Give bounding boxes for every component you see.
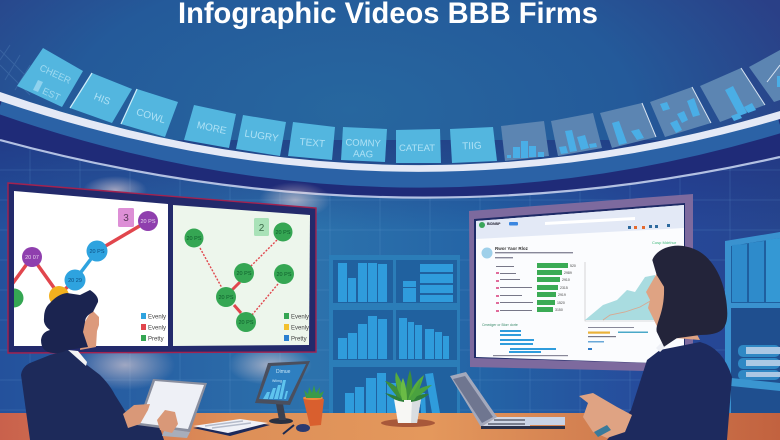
node: 20 PS xyxy=(219,295,234,301)
panel: network chart 2 xyxy=(173,205,310,346)
badge 3: 3 xyxy=(123,213,129,224)
side shelf xyxy=(725,232,780,414)
node xyxy=(22,247,42,267)
mouse and pen xyxy=(283,424,310,434)
tile: CHEER: EST xyxy=(40,86,62,104)
green bar chart: 2989 xyxy=(564,271,572,275)
hand xyxy=(579,393,632,438)
blue bar chart xyxy=(482,323,568,356)
node: 20 PS xyxy=(90,249,105,255)
badge 3 xyxy=(118,208,134,227)
monitor bars xyxy=(263,380,288,399)
panel: right wall display xyxy=(469,194,693,372)
desktop monitor xyxy=(255,361,310,424)
person: man with laptop xyxy=(21,290,207,440)
tile: LUGRY xyxy=(236,115,286,156)
node: 20 PS xyxy=(237,271,252,277)
node: 20 PS xyxy=(277,272,292,278)
badge 2: 2 xyxy=(259,223,265,234)
browser header: BIDNBP xyxy=(487,222,501,226)
tile: TEXT xyxy=(288,122,335,160)
tile: CATEAT xyxy=(396,129,441,163)
desk xyxy=(0,413,780,440)
node: 20 PS xyxy=(141,219,156,225)
potted plant: orange xyxy=(303,385,324,426)
tile: LUGRY: LUGRY xyxy=(244,128,279,145)
blue bar chart: Cmedger or Blorr dorte xyxy=(482,323,518,327)
legend: Evenly xyxy=(148,326,166,332)
bookshelf xyxy=(329,255,460,415)
green bar chart: 2315 xyxy=(560,286,568,290)
tile: HIS: HIS xyxy=(92,91,112,108)
wall glows xyxy=(75,176,331,390)
chart tile 3 xyxy=(600,103,656,148)
tile: COWL: COWL xyxy=(135,107,167,126)
node xyxy=(64,270,86,290)
green bar chart: 2919 xyxy=(558,293,566,297)
legend: Evenly xyxy=(148,314,166,320)
laptop xyxy=(137,379,207,438)
tile: CHEER xyxy=(17,48,83,107)
node xyxy=(138,211,158,231)
tile: COMNY AAG: AAG xyxy=(353,149,373,160)
node: 20 PS xyxy=(276,230,291,236)
green bar chart xyxy=(496,263,576,312)
hair xyxy=(652,246,727,347)
shirt collar xyxy=(68,350,87,366)
legend: Pretty xyxy=(291,336,307,342)
node: 20 07 xyxy=(25,255,39,261)
lower-right summary xyxy=(588,327,648,350)
tile: HIS xyxy=(70,73,132,123)
display frame xyxy=(8,183,316,353)
tile: TIIG xyxy=(450,127,497,163)
hair xyxy=(41,290,98,353)
tile: CHEER: CHEER xyxy=(38,63,73,87)
panel: network chart 3 xyxy=(4,191,168,346)
chart tile 1 xyxy=(501,121,549,161)
hands xyxy=(123,404,150,428)
display frame xyxy=(469,194,693,372)
desktop monitor: Wtimg xyxy=(272,379,282,383)
person: woman presenting xyxy=(579,246,732,440)
tile: COMNY AAG: COMNY xyxy=(345,137,382,150)
tile: TIIG: TIIG xyxy=(462,141,482,152)
green bar chart: 1520 xyxy=(557,301,565,305)
green bar chart: 3150 xyxy=(555,308,563,312)
tile: MORE xyxy=(184,105,236,148)
page heading xyxy=(482,240,677,258)
green bar chart: 520 xyxy=(570,264,576,268)
node: 20 29 xyxy=(68,278,82,284)
node: 20 PS xyxy=(239,320,254,326)
node xyxy=(86,240,108,262)
ceiling band xyxy=(0,92,780,198)
ceiling tiles: mini bar charts xyxy=(501,50,780,161)
chart tile 6 xyxy=(749,50,780,102)
chart tile 2 xyxy=(551,113,602,156)
page heading: Cosp Mdrthur xyxy=(652,240,677,245)
shirt collar xyxy=(656,337,676,352)
jacket xyxy=(21,350,164,440)
legend: Evenly xyxy=(291,314,309,320)
legend xyxy=(284,313,309,342)
face xyxy=(80,310,99,350)
page heading: Rwor Yaor Rloz xyxy=(495,246,529,251)
jacket xyxy=(607,342,732,440)
background: ceiling dome xyxy=(0,0,780,200)
white potted plant xyxy=(381,370,435,427)
desktop monitor: Dimue xyxy=(276,369,291,375)
screen xyxy=(476,205,684,364)
wrist band xyxy=(594,425,611,437)
tile: COWL xyxy=(121,89,178,137)
browser header xyxy=(476,205,684,239)
badge 2 xyxy=(254,218,269,236)
tile: COMNY AAG xyxy=(341,127,387,162)
legend: Evenly xyxy=(291,326,309,332)
legend: Pretty xyxy=(148,336,164,342)
chart tile 4 xyxy=(650,87,711,137)
binders xyxy=(738,345,780,380)
background: back wall xyxy=(0,140,780,440)
tile: MORE: MORE xyxy=(196,120,228,137)
tile: TEXT: TEXT xyxy=(299,137,325,150)
ceiling tiles: labels xyxy=(17,48,497,163)
area chart xyxy=(585,262,660,321)
keyboard and notebook xyxy=(193,419,270,436)
right laptop xyxy=(450,372,565,429)
chart tile 5 xyxy=(700,68,765,122)
node: 20 PS xyxy=(187,236,202,242)
green bar chart: 2910 xyxy=(562,278,570,282)
panel: left wall display xyxy=(4,183,316,353)
face and neck xyxy=(646,273,700,340)
tile: CATEAT: CATEAT xyxy=(399,143,435,154)
legend xyxy=(141,313,166,342)
